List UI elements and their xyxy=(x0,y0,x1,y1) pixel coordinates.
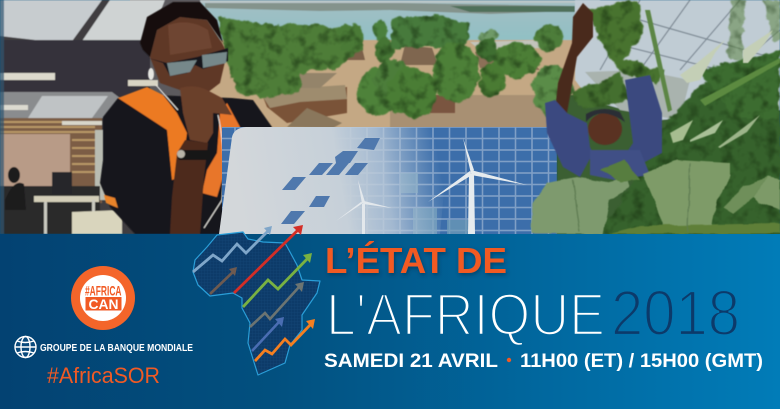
pale leaves xyxy=(645,10,780,148)
wind turbine: large xyxy=(428,138,527,234)
arrow: light blue xyxy=(193,231,268,272)
arrow head: light blue xyxy=(264,226,272,235)
event date: SAMEDI 21 AVRIL xyxy=(324,351,498,372)
Africa map with rising arrows xyxy=(193,225,320,375)
dark foliage mass xyxy=(570,0,780,234)
arrow head: orange xyxy=(306,319,315,329)
badge: #AfricaCAN xyxy=(71,266,135,330)
arrow: orange xyxy=(255,324,311,361)
arrow head: brown xyxy=(229,267,237,276)
title: year 2018: 2018 xyxy=(611,277,740,349)
photo: top montage xyxy=(0,0,780,234)
arrow: red xyxy=(234,230,298,293)
foreground leaves xyxy=(532,160,780,234)
arrow head: green xyxy=(303,253,312,263)
photo: village trees xyxy=(218,15,572,117)
wind turbine: small xyxy=(336,180,392,234)
orange separator dot xyxy=(507,358,511,362)
badge: #AfricaCAN: CAN xyxy=(88,296,118,312)
arrow head: gray xyxy=(295,282,304,292)
event time: 11H00 (ET) / 15H00 (GMT) xyxy=(520,351,763,372)
photo: solar panels and laptop xyxy=(219,127,557,234)
farmer xyxy=(545,3,662,180)
title: L'AFRIQUE: L'AFRIQUE xyxy=(326,282,605,348)
photo: farmer and plants xyxy=(532,0,780,234)
photo: office background xyxy=(0,0,165,234)
greenhouse background xyxy=(557,0,780,234)
arrow head: blue xyxy=(275,317,284,327)
map outline xyxy=(193,232,320,375)
badge: #AfricaCAN: #AFRICA xyxy=(85,282,122,298)
icon: World Bank globe xyxy=(15,336,36,358)
arrow: blue xyxy=(252,322,279,351)
logo text: World Bank Group: GROUPE DE LA BANQUE MONDIALE xyxy=(40,343,193,354)
arrow: green xyxy=(243,258,308,307)
arrow: gray xyxy=(250,287,299,327)
photo: backing behind the woman xyxy=(130,0,210,120)
hashtag: #AfricaSOR xyxy=(47,363,160,388)
photo: lake and sandy ground xyxy=(200,0,600,130)
solar cell accents xyxy=(281,138,380,224)
arrow head: red xyxy=(293,225,303,235)
blue information band xyxy=(0,234,780,409)
photo: woman at laptop xyxy=(100,2,272,234)
title: L'ÉTAT DE: L’ÉTAT DE xyxy=(325,240,507,281)
photo: village huts xyxy=(263,40,542,128)
arrow: brown xyxy=(210,272,233,294)
